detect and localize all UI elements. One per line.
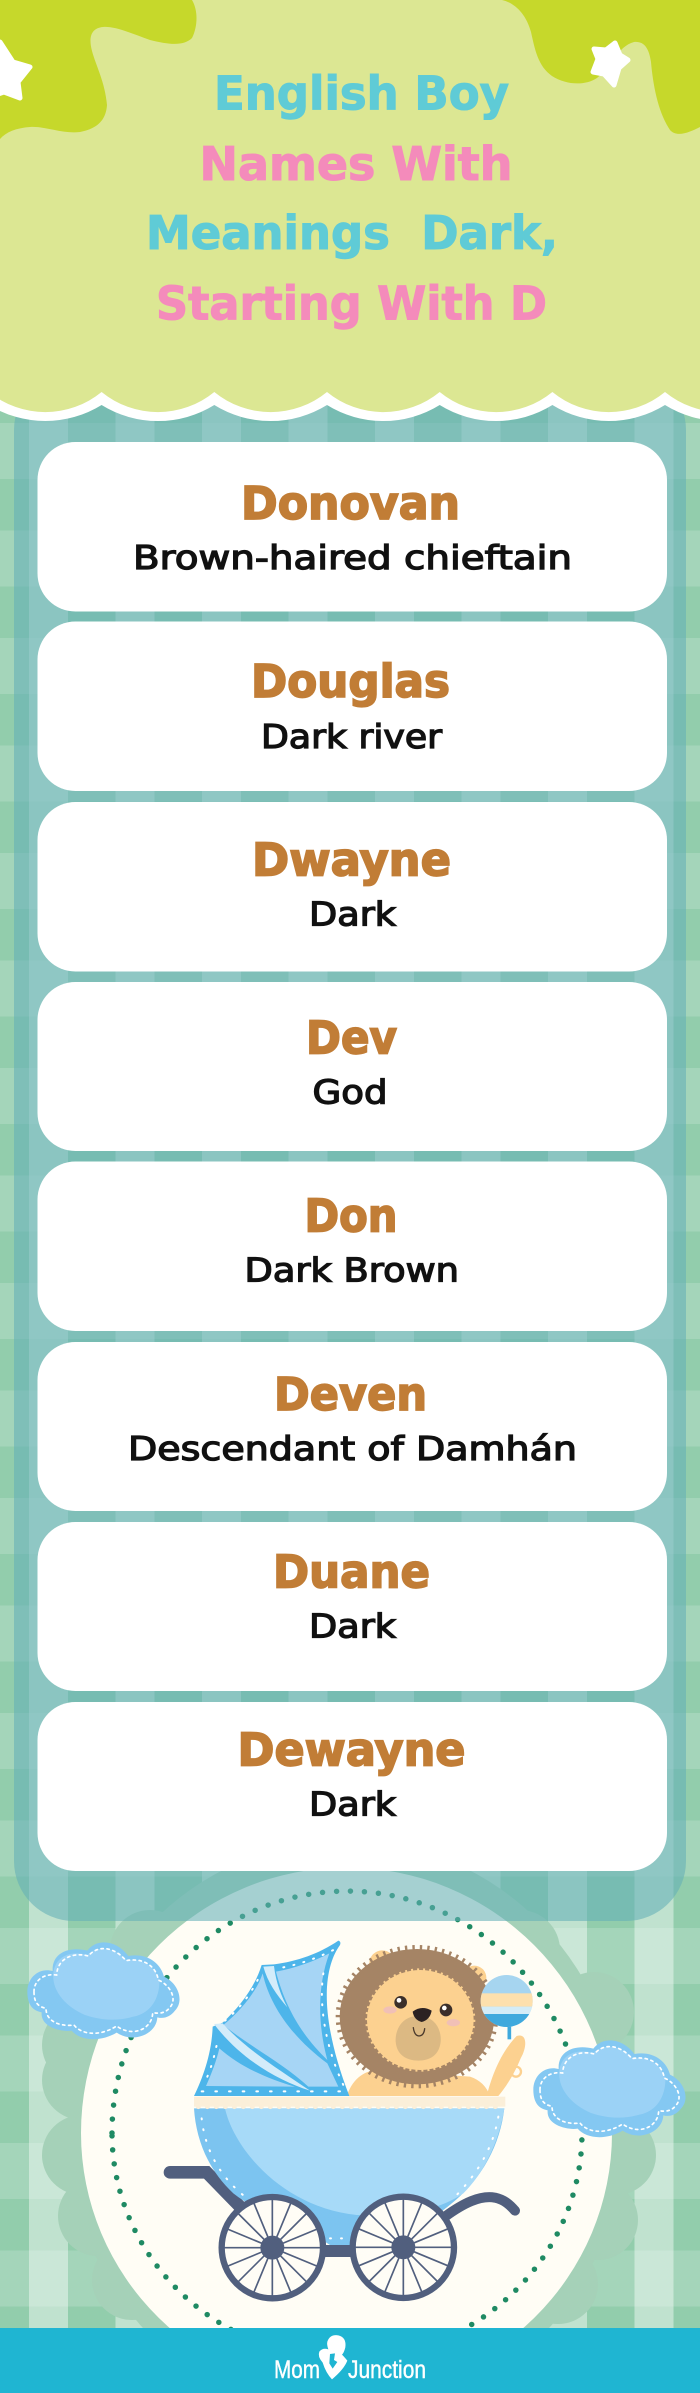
lion face <box>367 1970 474 2070</box>
name: Dev <box>306 1012 397 1064</box>
meaning: Dark <box>309 1606 397 1646</box>
footer bar <box>0 2328 700 2393</box>
title <box>146 66 558 330</box>
logo text: Mom <box>274 2356 320 2384</box>
panel: translucent list backing <box>14 370 686 1921</box>
card: Dwayne <box>38 802 667 972</box>
icon: right cloud <box>533 2040 686 2137</box>
name: Douglas <box>251 655 450 708</box>
card: Deven <box>38 1342 667 1511</box>
card: Donovan <box>38 442 667 612</box>
right wheel <box>353 2197 454 2298</box>
stroller trim <box>194 2097 505 2107</box>
dotted ring <box>112 1891 582 2359</box>
lion ears <box>369 1950 486 1990</box>
meaning: Dark river <box>261 717 442 756</box>
icon: star right <box>593 43 628 85</box>
decorative lime blob: top right <box>502 0 700 134</box>
illustration: lion in stroller <box>170 1941 533 2298</box>
meaning: God <box>312 1072 388 1112</box>
header background with scallops <box>0 0 700 421</box>
lion mane <box>340 1949 494 2084</box>
title: Names With <box>200 137 512 191</box>
meaning: Descendant of Damhán <box>128 1429 577 1468</box>
card: Dev <box>38 982 667 1151</box>
lion arm <box>487 2035 525 2096</box>
scalloped green backdrop <box>42 1840 656 2393</box>
axle <box>323 2245 355 2257</box>
name: Duane <box>273 1546 430 1598</box>
name: Deven <box>274 1368 427 1421</box>
decorative lime blob: top left <box>0 0 196 139</box>
meaning: Brown-haired chieftain <box>133 538 572 577</box>
meaning: Dark <box>309 894 397 934</box>
stroller basket <box>194 2108 504 2245</box>
name: Dwayne <box>252 834 451 886</box>
left wheel <box>222 2197 323 2298</box>
meaning: Dark <box>309 1784 397 1824</box>
name: Donovan <box>241 477 460 530</box>
logo text continued: Junction <box>348 2356 426 2384</box>
card: Dewayne <box>38 1702 667 1871</box>
title: English Boy <box>214 66 509 120</box>
logo icon <box>319 2335 347 2379</box>
lion body <box>347 2070 490 2096</box>
logo: MomJunction <box>274 2335 426 2384</box>
icon: rattle <box>480 1973 533 2039</box>
card: Douglas <box>38 622 667 791</box>
stroller handle and axle <box>170 2172 515 2217</box>
icon: star left <box>0 42 30 98</box>
stroller canopy <box>194 1941 349 2096</box>
card: Don <box>38 1162 667 1331</box>
icon: left cloud <box>27 1942 180 2039</box>
title: Starting With D <box>156 276 547 330</box>
name: Don <box>304 1190 398 1242</box>
card: Duane <box>38 1522 667 1691</box>
white circle <box>81 1868 612 2393</box>
name: Dewayne <box>238 1724 466 1776</box>
meaning: Dark Brown <box>244 1250 459 1290</box>
title: Meanings Dark, <box>146 206 558 260</box>
